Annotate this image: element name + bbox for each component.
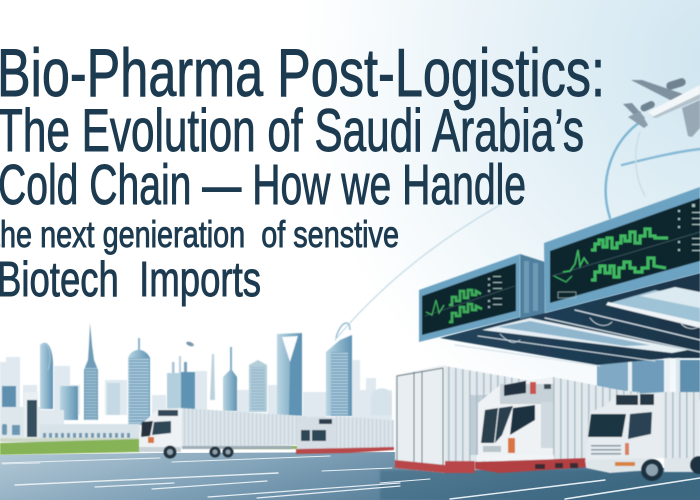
round glass tower	[128, 338, 150, 425]
flight arcs	[335, 122, 700, 340]
low waterfront building	[0, 392, 140, 440]
title line 4: the next genieration of senstive	[0, 214, 399, 255]
dome building	[371, 388, 392, 415]
arc tower	[326, 323, 352, 416]
support pillars	[597, 355, 700, 400]
road	[0, 452, 700, 500]
dark underside	[440, 273, 700, 365]
skyline	[0, 323, 392, 440]
grass verge	[0, 438, 300, 455]
small blue towers	[2, 383, 120, 420]
twin towers	[167, 356, 195, 411]
spire tower	[84, 323, 98, 420]
block tower	[249, 360, 267, 412]
drone	[186, 341, 194, 347]
overhead gantry structure	[440, 254, 700, 400]
monitor: right display	[544, 187, 700, 313]
monitor: left display	[419, 254, 520, 342]
title line 5: Biotech Imports	[0, 253, 261, 307]
spire	[210, 354, 215, 400]
structural beams	[455, 310, 700, 366]
glass roof panels	[482, 287, 700, 353]
refrigerated truck centre	[475, 377, 630, 473]
icon: airplane	[623, 77, 700, 137]
truck far left	[139, 408, 305, 458]
curved tower	[40, 343, 53, 409]
pale background towers	[0, 357, 392, 422]
Kingdom Centre tower	[277, 333, 302, 416]
road markings	[2, 456, 700, 499]
slim tower	[223, 347, 237, 411]
truck far middle	[296, 416, 394, 454]
refrigerated truck right	[585, 392, 700, 481]
container truck	[395, 365, 640, 473]
side of container	[520, 254, 545, 319]
title	[0, 35, 605, 307]
